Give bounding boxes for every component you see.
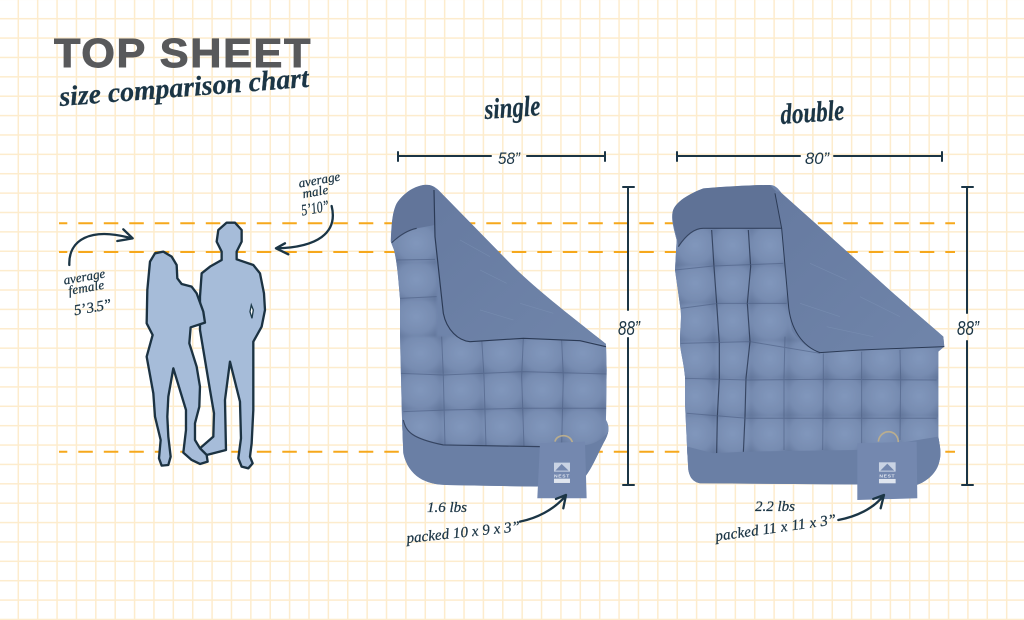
arrow: male height <box>276 206 333 254</box>
caption: double packed size: packed 11 x 11 x 3” <box>713 512 837 545</box>
dashed height guide lines <box>59 223 955 452</box>
dimension: double width 80 <box>677 149 942 168</box>
single bottom band <box>402 420 608 487</box>
label: average male: 5’10” <box>300 198 331 220</box>
label: average female: female <box>67 277 105 298</box>
title: TOP SHEET <box>54 30 312 76</box>
dimension: double height 88: 88” <box>957 318 980 340</box>
caption: double weight: 2.2 lbs <box>755 499 795 515</box>
people silhouettes <box>147 223 265 468</box>
hand gap <box>250 305 253 318</box>
double bottom band <box>687 436 940 485</box>
caption: single weight: 1.6 lbs <box>427 500 467 516</box>
heading: double: double <box>779 95 845 131</box>
dimension: single width 58: 58” <box>498 149 521 168</box>
label: average male <box>295 168 346 220</box>
double flap wrinkles <box>800 263 900 337</box>
label: average male: male <box>301 182 330 201</box>
bag: single: NEST <box>554 473 570 479</box>
double folded flap <box>775 192 944 353</box>
single quilted cells <box>393 227 610 447</box>
single flap wrinkles <box>460 240 553 320</box>
arrow: female height <box>69 229 133 265</box>
label: average male: average <box>297 168 341 191</box>
bag: double <box>857 432 917 500</box>
dimension: single height 88: 88” <box>618 318 641 340</box>
bag: double: NEST <box>879 473 895 479</box>
dimension: single height 88 <box>618 187 641 485</box>
caption: single packed size: packed 10 x 9 x 3” <box>405 519 521 547</box>
dimension: single width 58 <box>398 149 605 168</box>
dimension: double height 88 <box>957 187 980 485</box>
arrow: single packed bag <box>520 495 566 522</box>
dimension: double width 80: 80” <box>805 149 830 168</box>
single folded flap <box>433 188 606 344</box>
single top fold <box>391 185 435 242</box>
label: average female <box>62 265 113 320</box>
bag: single <box>537 436 587 498</box>
subtitle: size comparison chart <box>57 63 311 113</box>
label: average female: 5’ 3.5” <box>73 297 113 319</box>
double top band <box>672 185 782 247</box>
arrow: double packed bag <box>838 495 884 520</box>
double quilted cells <box>673 228 940 455</box>
heading: single: single <box>482 90 541 126</box>
quilt: double <box>667 180 950 500</box>
silhouette: female <box>147 252 208 466</box>
quilt: single <box>387 180 613 498</box>
label: average female: average <box>62 265 106 288</box>
silhouette: male <box>200 223 265 468</box>
